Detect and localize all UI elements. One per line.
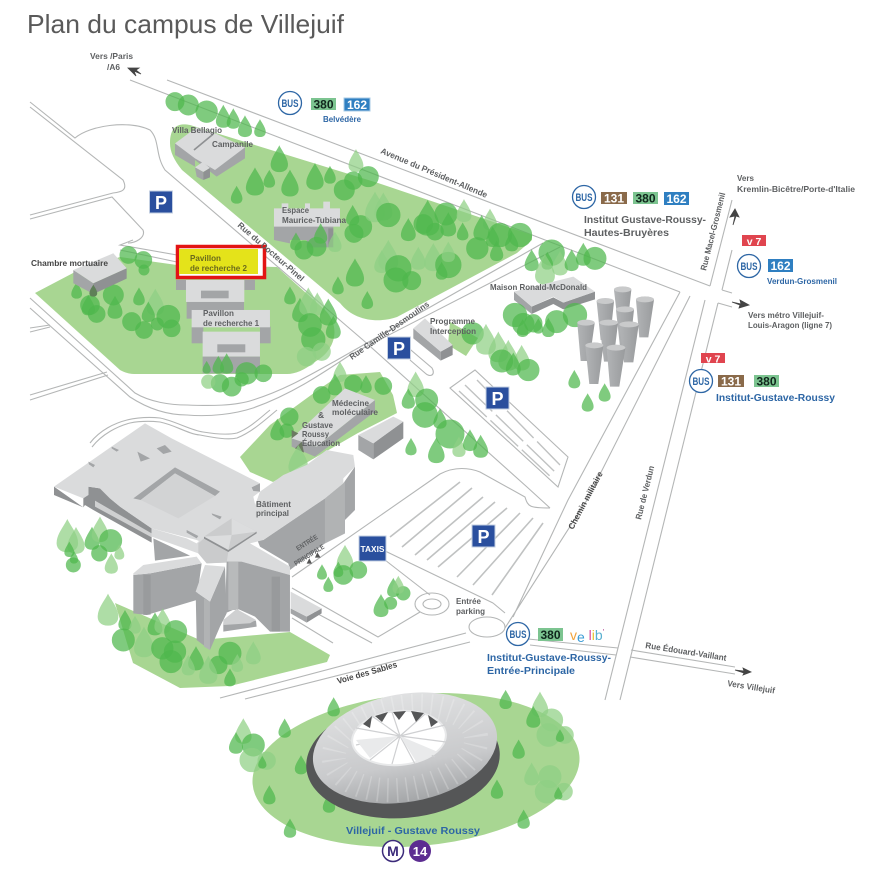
- upper right parking: [450, 370, 568, 487]
- trees and building: Programme Interception: [413, 318, 539, 381]
- bus stop: Hautes-Bruyères: 162: [666, 192, 687, 206]
- bus stop: Verdun-Grosmenil: 162: [770, 259, 791, 273]
- trees: along Rue du Docteur-Pinel: [317, 373, 488, 617]
- place and road labels: Avenue du Président-Allende: [379, 146, 489, 200]
- place and road labels: Interception: [430, 326, 476, 336]
- bus stop: Entrée-Principale: ': [603, 628, 605, 637]
- roof notches: [88, 445, 260, 538]
- place and road labels: Chemin militaire: [566, 470, 605, 531]
- right lower wing: [225, 562, 290, 632]
- stadium building: [301, 679, 506, 826]
- building: Bâtiment principal: [54, 423, 355, 650]
- road network: [30, 80, 735, 700]
- metro stop: Villejuif - Gustave Roussy: M: [387, 843, 399, 859]
- title: Plan du campus de Villejuif: [27, 9, 345, 39]
- place and road labels: Espace: [282, 205, 309, 215]
- bus stop: Belvédère: Belvédère: [323, 115, 362, 124]
- metro stop: Villejuif - Gustave Roussy: Villejuif - Gustave Roussy: [346, 825, 480, 837]
- place and road labels: Rue Camille-Desmoulins: [347, 299, 431, 362]
- bus stop: Belvédère: 162: [347, 98, 367, 112]
- green area: upper park: [170, 124, 532, 320]
- place and road labels: parking: [456, 606, 485, 616]
- place and road labels: Médecine: [332, 398, 369, 408]
- place and road labels: /A6: [107, 62, 120, 72]
- bus stop: Verdun-Grosmenil: [738, 235, 837, 286]
- building: Chambre mortuaire: [73, 253, 127, 297]
- place and road labels: Roussy: [302, 429, 329, 439]
- place and road labels: Vers métro Villejuif-: [748, 310, 824, 320]
- place and road labels: Vers /Paris: [90, 51, 133, 61]
- bus stop: Institut-Gustave-Roussy: 380: [756, 374, 777, 388]
- highlight: Pavillon de recherche 2: de recherche 2: [190, 263, 247, 273]
- bus stop: Verdun-Grosmenil: BUS: [740, 261, 758, 273]
- bus stop: Belvédère: BUS: [282, 98, 298, 110]
- trees: research park: [72, 247, 340, 366]
- station: metro trees: [229, 691, 573, 837]
- place and road labels: Entrée: [456, 596, 481, 606]
- highlight: Pavillon de recherche 2: Pavillon: [190, 253, 221, 263]
- bus stop: Belvédère: 380: [313, 98, 334, 112]
- bus stop: Hautes-Bruyères: 131: [604, 192, 624, 206]
- place and road labels: Bâtiment: [256, 499, 291, 509]
- icon: taxi sign: [359, 536, 386, 561]
- building: Villa Bellagio and Campanile: [175, 127, 245, 180]
- bus stop: Entrée-Principale: 380: [540, 628, 561, 642]
- green area: medicine park: [240, 372, 397, 482]
- place and road labels: Pavillon: [203, 308, 234, 318]
- bus stop: Hautes-Bruyères: BUS: [576, 192, 592, 204]
- courtyard: [133, 467, 220, 500]
- icon: taxi sign: TAXIS: [360, 544, 385, 554]
- place and road labels: &: [318, 410, 324, 420]
- bus stop: Entrée-Principale: [487, 622, 611, 677]
- arrow: towards Villejuif: [735, 668, 751, 675]
- place and road labels: Rue Édouard-Vaillant: [645, 640, 727, 663]
- bus stop: Institut-Gustave-Roussy: BUS: [692, 376, 710, 388]
- arrow: towards Paris: [128, 68, 141, 76]
- place and road labels: Rue du Docteur-Pinel: [236, 220, 306, 283]
- bus stop: Entrée-Principale: ib: [592, 627, 603, 643]
- roundabouts: [415, 593, 505, 637]
- right wing walls: [257, 467, 355, 570]
- left lower wing: [133, 563, 202, 615]
- central tower: [196, 567, 227, 650]
- bus stop: Hautes-Bruyères: Institut Gustave-Roussy-: [584, 215, 706, 226]
- place and road labels: Campanile: [212, 139, 253, 149]
- bus stop: Institut-Gustave-Roussy: v 7: [706, 354, 720, 366]
- trees: upper park east: [346, 193, 606, 292]
- place and road labels: moléculaire: [332, 407, 378, 417]
- bus stop: Entrée-Principale: v: [570, 627, 577, 643]
- bus stop: Entrée-Principale: Institut-Gustave-Roussy-: [487, 653, 611, 664]
- place and road labels: Vers Villejuif: [727, 678, 776, 696]
- icon: parking signs: P: [393, 339, 405, 359]
- entrance block: [152, 528, 290, 575]
- building: Maison Ronald-McDonald: [503, 277, 595, 337]
- place and road labels: Rue Macel-Grosmenil: [698, 191, 727, 271]
- green area: metro ellipse: [246, 680, 586, 860]
- icon: parking signs: P: [155, 193, 167, 213]
- place and road labels: ENTRÉE: [294, 532, 320, 553]
- green area: research park: [35, 257, 334, 374]
- place and road labels: Éducation: [302, 438, 340, 448]
- place and road labels: PRINCIPALE: [293, 544, 326, 568]
- building: Pavillons de recherche: [176, 280, 272, 396]
- bus stop: Hautes-Bruyères: 380: [635, 192, 656, 206]
- metro stop: Villejuif - Gustave Roussy: [346, 825, 480, 862]
- bus stop: Verdun-Grosmenil: Verdun-Grosmenil: [767, 276, 837, 286]
- bus stop: Entrée-Principale: l: [585, 627, 592, 643]
- arrow: towards Kremlin-Bicêtre: [730, 209, 739, 225]
- bus stop: Hautes-Bruyères: Hautes-Bruyères: [584, 228, 669, 239]
- highlight: Pavillon de recherche 2: [178, 246, 264, 278]
- metro stop: Villejuif - Gustave Roussy: 14: [413, 844, 428, 859]
- annex: [291, 608, 307, 623]
- bus stop: Verdun-Grosmenil: v 7: [747, 236, 761, 248]
- place and road labels: Rue de Verdun: [633, 465, 656, 520]
- bus stop: Institut-Gustave-Roussy: [690, 353, 835, 404]
- trees: upper park west: [166, 93, 378, 309]
- place and road labels: principal: [256, 508, 289, 518]
- icon: parking signs: [150, 191, 509, 547]
- green area: hospital garden: [115, 603, 330, 688]
- parking stripes: [390, 482, 543, 595]
- arrow: towards metro Louis-Aragon: [732, 300, 749, 308]
- trees: hospital garden: [98, 595, 260, 686]
- building and trees: Médecine moléculaire: [271, 362, 403, 475]
- place and road labels: [31, 51, 855, 696]
- pedestrians: [307, 552, 321, 564]
- bus stop: Entrée-Principale: e: [577, 629, 585, 645]
- bus stop: Institut-Gustave-Roussy: 131: [721, 374, 741, 388]
- green area: interception park: [448, 322, 478, 356]
- rotunda: [223, 621, 257, 632]
- towers: [569, 286, 654, 411]
- building: Espace Maurice-Tubiana: [274, 202, 341, 259]
- place and road labels: Voie des Sables: [336, 659, 398, 686]
- place and road labels: Villa Bellagio: [172, 125, 222, 135]
- place and road labels: Maison Ronald-McDonald: [490, 282, 587, 292]
- place and road labels: Chambre mortuaire: [31, 258, 108, 268]
- bus stop: Hautes-Bruyères: [572, 186, 706, 239]
- icon: parking signs: P: [491, 389, 504, 409]
- icon: parking signs: P: [477, 527, 490, 547]
- place and road labels: Vers: [737, 173, 754, 183]
- place and road labels: Maurice-Tubiana: [282, 215, 346, 225]
- bus stop: Institut-Gustave-Roussy: Institut-Gustave-Roussy: [716, 393, 835, 404]
- bus stop: Entrée-Principale: BUS: [510, 629, 526, 641]
- place and road labels: Louis-Aragon (ligne 7): [748, 320, 832, 330]
- bus stop: Belvédère: [278, 92, 370, 124]
- right wing roof: [253, 450, 355, 540]
- rear block walls: [54, 487, 152, 543]
- place and road labels: Programme: [430, 316, 475, 326]
- place and road labels: Gustave: [302, 420, 333, 430]
- rear block roof: [54, 423, 263, 552]
- bus stop: Entrée-Principale: Entrée-Principale: [487, 666, 575, 677]
- place and road labels: de recherche 1: [203, 318, 259, 328]
- place and road labels: Kremlin-Bicêtre/Porte-d'Italie: [737, 184, 855, 194]
- trees: left of main building: [57, 518, 124, 573]
